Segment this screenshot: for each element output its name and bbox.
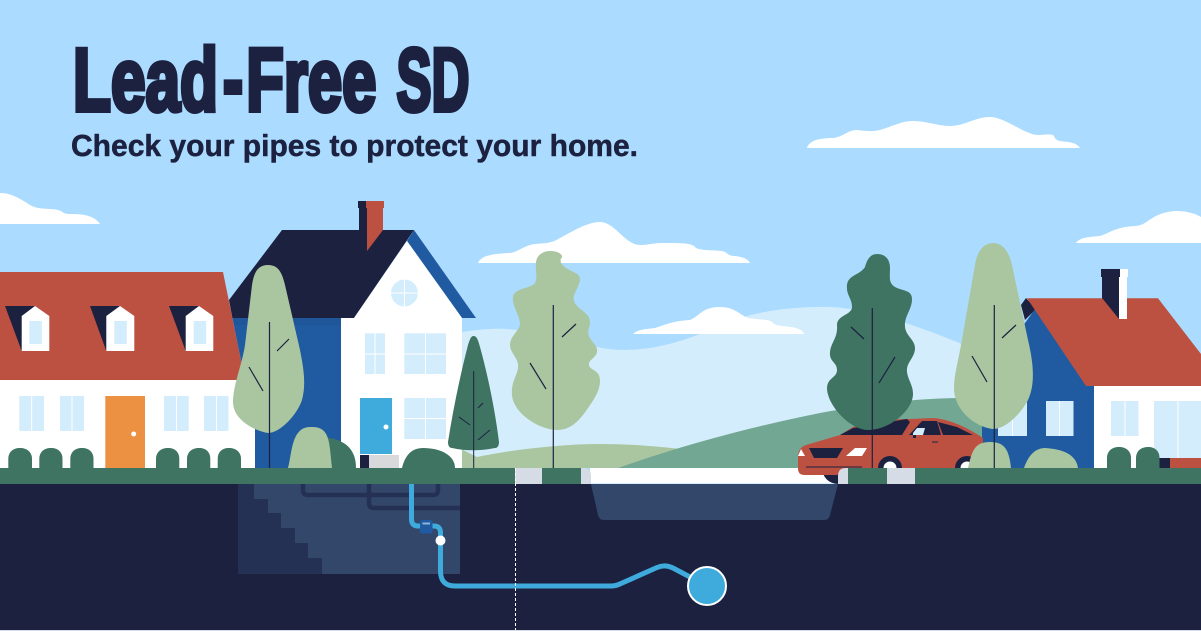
front steps xyxy=(360,455,399,468)
blue roof trim xyxy=(407,230,476,318)
white wall xyxy=(0,380,255,468)
white wall xyxy=(1094,386,1201,468)
cloud: centre xyxy=(478,222,750,263)
side windows xyxy=(909,421,941,435)
cloud: far right xyxy=(1076,211,1201,243)
house: right with red roof xyxy=(982,269,1201,468)
road surface xyxy=(590,468,840,484)
tree: centre wavy light green xyxy=(510,251,600,468)
cloud: small centre right xyxy=(633,307,804,334)
basement stairs xyxy=(238,484,322,574)
service line pipe xyxy=(412,484,726,605)
subtitle: Check your pipes to protect your home. xyxy=(71,128,638,163)
mirror xyxy=(913,428,925,435)
tree: dark wavy right xyxy=(827,254,915,468)
car body xyxy=(798,418,983,475)
blue side wall xyxy=(232,318,341,468)
house: left with red roof xyxy=(0,272,255,468)
cloud: far left xyxy=(0,193,100,224)
windows xyxy=(998,401,1201,458)
blue door xyxy=(360,398,392,454)
navy roof xyxy=(229,230,414,318)
tree: tall light green left xyxy=(233,265,304,468)
water meter xyxy=(420,520,432,534)
windows xyxy=(365,333,446,439)
tree: small dark conifer xyxy=(448,336,499,468)
hill: light green xyxy=(430,441,700,468)
shrubs and steps xyxy=(1107,447,1201,468)
chimney xyxy=(1101,269,1128,319)
green verge xyxy=(0,468,1201,484)
property line xyxy=(514,468,516,631)
household pipes xyxy=(303,484,460,508)
house: centre with navy roof xyxy=(229,201,476,468)
water main xyxy=(688,567,726,605)
underground xyxy=(0,484,1201,631)
title: Free xyxy=(246,30,376,130)
cloud: top right xyxy=(807,117,1080,148)
shutoff valve xyxy=(436,536,446,546)
car xyxy=(798,418,983,484)
round window xyxy=(391,280,418,306)
orange door xyxy=(105,396,145,468)
chimney xyxy=(358,201,384,251)
red roof xyxy=(1027,298,1201,386)
road trench xyxy=(591,484,838,520)
headlights xyxy=(846,448,867,456)
pale distant hills xyxy=(440,307,1040,468)
dormers xyxy=(5,306,213,351)
hedge shrubs xyxy=(8,448,241,468)
near wheel xyxy=(822,452,854,484)
title: - xyxy=(223,30,243,130)
basement xyxy=(238,484,460,574)
blue wall xyxy=(982,309,1094,468)
grille xyxy=(809,448,843,458)
windshield xyxy=(840,419,910,435)
title: SD xyxy=(396,30,470,130)
tree: tall light green right xyxy=(954,243,1078,468)
navy roof corner xyxy=(1021,298,1036,320)
wheels xyxy=(878,456,902,480)
bottom edge xyxy=(0,630,1201,631)
white front wall xyxy=(341,241,462,468)
title: Lead xyxy=(73,30,218,130)
windows xyxy=(19,396,228,431)
shrubs beside centre house xyxy=(288,427,455,468)
hill: mid green xyxy=(618,398,1000,468)
red roof xyxy=(0,272,245,380)
